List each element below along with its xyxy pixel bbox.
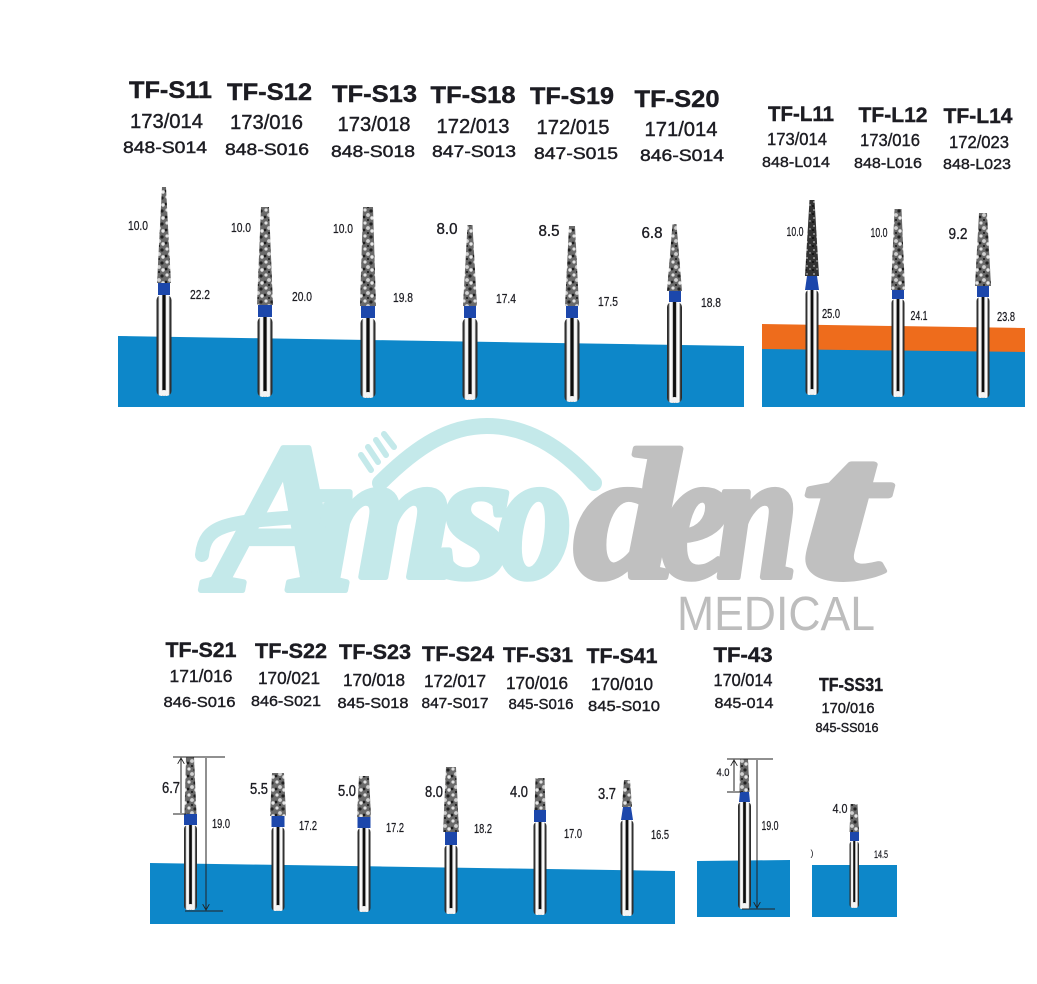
logo word: dent: d	[574, 413, 681, 618]
blue background band	[697, 860, 790, 917]
product TF-S41: 845-S010	[588, 698, 660, 715]
product TF-L12: 10.0	[870, 225, 888, 240]
product TF-S24: 847-S017	[422, 695, 488, 712]
product TF-S22: 170/021	[258, 668, 320, 688]
product TF-S19: 17.5	[598, 294, 618, 309]
product TF-S31: 845-S016	[508, 696, 574, 713]
product TF-43: 170/014	[714, 670, 773, 690]
logo word: dent: e	[660, 413, 730, 618]
panel: TF-43	[697, 644, 790, 917]
product TF-43: TF-43	[714, 644, 772, 667]
product TF-S24: 8.0	[425, 784, 443, 801]
product TF-S19: 8.5	[538, 223, 560, 240]
product TF-S11: 173/014	[130, 111, 203, 133]
product TF-S20: 18.8	[701, 295, 721, 310]
product TF-L14: 23.8	[997, 309, 1015, 324]
product TF-S24: TF-S24	[422, 643, 494, 666]
product TF-S20	[634, 86, 724, 403]
product TF-S11: 10.0	[128, 218, 148, 233]
product TF-43	[714, 644, 778, 909]
blue background band	[762, 349, 1025, 407]
product TF-L12: 173/016	[860, 130, 920, 150]
product TF-S13: 19.8	[393, 290, 413, 305]
product TF-S22: 5.5	[250, 781, 268, 798]
product TF-SS31: 170/016	[822, 700, 874, 717]
product TF-L14: 9.2	[948, 226, 968, 243]
product TF-S31: TF-S31	[503, 644, 573, 667]
product TF-S24	[422, 643, 494, 914]
product TF-S11: 22.2	[190, 287, 210, 302]
panel: top-left bur series TF-S11 to TF-S20	[118, 77, 744, 407]
product TF-S20: 846-S014	[640, 146, 724, 165]
product TF-L14: 172/023	[949, 132, 1009, 152]
product TF-S21: 846-S016	[164, 694, 236, 711]
product TF-S23: 5.0	[338, 783, 356, 800]
product TF-S23: 17.2	[386, 820, 404, 835]
product TF-S13	[331, 81, 417, 398]
product TF-S12: TF-S12	[227, 79, 312, 106]
product TF-S21: 19.0	[212, 816, 230, 831]
product TF-S18: 172/013	[436, 116, 510, 138]
product TF-S22: 846-S021	[251, 693, 321, 710]
product TF-S31	[503, 644, 582, 915]
product TF-S22: TF-S22	[255, 640, 327, 663]
panel: top-right long bur series TF-L11 to TF-L14	[762, 103, 1025, 407]
product TF-S13: 173/018	[338, 114, 410, 136]
logo word: dent	[574, 400, 892, 621]
product TF-SS31: 845-SS016	[816, 720, 878, 735]
product TF-S13: 10.0	[333, 221, 353, 236]
logo word: Amso	[200, 398, 572, 637]
product TF-S19	[530, 83, 618, 402]
product TF-S24: 18.2	[474, 821, 492, 836]
product TF-L14: TF-L14	[944, 105, 1013, 128]
logo word: dent: n	[716, 414, 798, 618]
product TF-L14	[943, 105, 1015, 398]
product TF-L11: 10.0	[786, 224, 804, 239]
orange stripe	[762, 324, 1025, 352]
product TF-S11: TF-S11	[129, 77, 212, 104]
product TF-SS31	[810, 675, 888, 908]
logo: Amsodent Medical	[200, 398, 892, 641]
icon: toothbrush arc	[361, 426, 594, 483]
logo subtitle: MEDICAL	[677, 588, 875, 641]
product TF-S41: 16.5	[651, 827, 669, 842]
product TF-S13: 848-S018	[331, 142, 415, 161]
product TF-S12	[225, 79, 312, 397]
product TF-L11: TF-L11	[768, 103, 834, 126]
logo word: Amso: o	[498, 414, 572, 618]
product TF-S20: 6.8	[642, 225, 662, 242]
product TF-S19: 172/015	[536, 117, 610, 139]
logo word: Amso: m	[310, 413, 454, 618]
product TF-S41	[586, 645, 669, 916]
product TF-S20: 171/014	[644, 119, 718, 141]
product TF-S18: 8.0	[436, 221, 458, 238]
product TF-S18: 847-S013	[432, 142, 516, 161]
product TF-43: 4.0	[716, 767, 730, 779]
product TF-SS31: 4.0	[832, 801, 848, 816]
product TF-L12: 24.1	[910, 308, 928, 323]
product TF-L12	[854, 104, 928, 397]
product TF-S41: 3.7	[598, 786, 616, 803]
product TF-S31: 17.0	[564, 826, 582, 841]
product TF-L12: 848-L016	[854, 155, 922, 172]
product TF-S31: 170/016	[506, 673, 568, 693]
product TF-L11: 25.0	[822, 306, 840, 321]
product TF-S18: TF-S18	[430, 82, 516, 109]
product TF-S21: 6.7	[162, 780, 180, 797]
product TF-L11: 848-L014	[762, 154, 830, 171]
product TF-L11	[762, 103, 840, 395]
blue background band	[812, 865, 897, 917]
product TF-S18	[430, 82, 516, 400]
product TF-SS31: 14.5	[874, 849, 888, 861]
product TF-S22: 17.2	[299, 818, 317, 833]
product TF-S19: TF-S19	[530, 83, 614, 110]
product TF-S12: 173/016	[230, 112, 303, 134]
product TF-43: 845-014	[714, 695, 774, 712]
product TF-L11: 173/014	[767, 129, 827, 149]
product TF-SS31: )	[810, 848, 814, 858]
product TF-S24: 172/017	[424, 671, 486, 691]
blue background band	[118, 336, 744, 407]
panel: bottom-left bur series TF-S21 to TF-S41	[150, 639, 675, 924]
product TF-S21: TF-S21	[166, 639, 237, 662]
panel: TF-SS31	[810, 675, 897, 917]
logo word: Amso: A	[200, 398, 355, 637]
product TF-S18: 17.4	[496, 291, 516, 306]
product TF-S12: 848-S016	[225, 140, 309, 159]
blue background band	[150, 863, 675, 924]
product TF-S11	[123, 77, 212, 396]
product TF-L12: TF-L12	[858, 104, 928, 127]
product TF-S11: 848-S014	[123, 138, 207, 157]
logo word: dent: t	[800, 400, 892, 621]
product TF-S13: TF-S13	[332, 81, 417, 108]
product TF-S20: TF-S20	[634, 86, 720, 113]
product TF-S12: 10.0	[231, 220, 251, 235]
product TF-S21	[162, 639, 237, 911]
product TF-L14: 848-L023	[943, 156, 1011, 173]
logo word: Amso: s	[439, 413, 512, 618]
product TF-S23: 170/018	[343, 670, 405, 690]
product TF-S12: 20.0	[292, 289, 312, 304]
product TF-S19: 847-S015	[534, 144, 618, 163]
product TF-S22	[250, 640, 327, 911]
product TF-S41: 170/010	[591, 674, 653, 694]
product TF-S41: TF-S41	[586, 645, 658, 668]
product TF-43: 19.0	[762, 818, 778, 833]
product TF-SS31: TF-SS31	[819, 675, 883, 695]
product TF-S31: 4.0	[510, 784, 528, 801]
product TF-S23: TF-S23	[339, 641, 411, 664]
product TF-S21: 171/016	[170, 666, 232, 686]
product TF-S23: 845-S018	[338, 695, 408, 712]
product TF-S23	[338, 641, 411, 912]
